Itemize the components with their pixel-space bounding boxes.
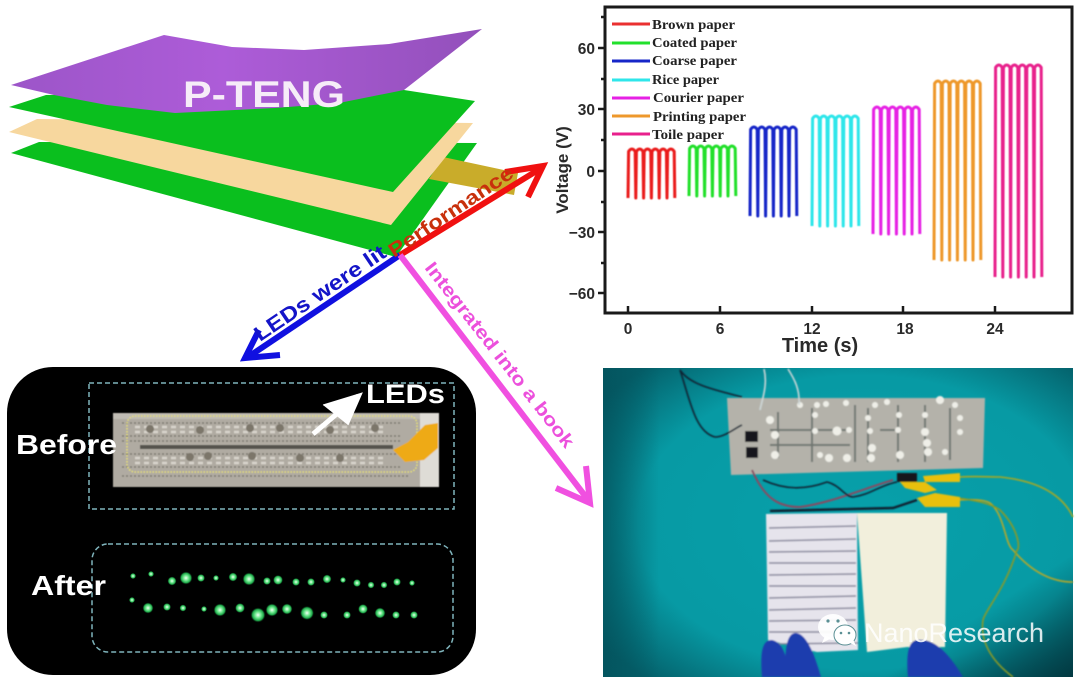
P-TENG layered device (9, 29, 518, 257)
legend (612, 17, 746, 142)
x tick labels: 12 (803, 321, 821, 338)
label: Performance: Performance (384, 162, 518, 262)
y tick labels: 0 (586, 164, 595, 181)
wires (680, 369, 1073, 677)
purple top layer (11, 29, 482, 113)
voltage chart (553, 7, 1072, 357)
arrow: LEDs were lit (245, 255, 400, 358)
blue gloves (761, 633, 963, 677)
lit green LEDs (129, 571, 418, 622)
bottom green layer (11, 142, 477, 257)
x tick labels: 0 (624, 321, 632, 338)
legend: Coated paper (652, 35, 737, 50)
y tick labels: −60 (569, 286, 595, 303)
x tick labels: 6 (716, 321, 725, 338)
label: Integrated into a book: Integrated into a book (421, 258, 580, 452)
legend: Rice paper (652, 72, 719, 87)
watermark NanoResearch: NanoResearch (864, 618, 1044, 648)
breadboard photo (113, 413, 439, 487)
book lines (769, 526, 858, 644)
P-TENG label: P-TENG (183, 74, 345, 115)
label: After: After (31, 570, 106, 601)
dashed box: before (89, 383, 454, 509)
arrow: performance (400, 166, 543, 255)
top green layer (9, 90, 475, 192)
label: Before: Before (16, 429, 117, 460)
waveforms (628, 65, 1042, 277)
board dark traces (770, 405, 950, 462)
axis ticks (598, 17, 995, 313)
legend: Coarse paper (652, 53, 737, 68)
circuit board (727, 398, 985, 475)
panel: LEDs before and after (7, 367, 476, 675)
x axis title: Time (s) (782, 335, 858, 357)
legend: Brown paper (652, 17, 735, 32)
y tick labels: 60 (578, 41, 595, 58)
legend: Toile paper (652, 127, 724, 142)
wechat icon (818, 614, 856, 646)
arrow: integrated into a book (400, 255, 590, 503)
plot frame (605, 7, 1072, 313)
y tick labels: −30 (569, 225, 595, 242)
x tick labels (624, 321, 1004, 338)
y tick labels (569, 41, 595, 303)
label: LEDs were lit: LEDs were lit (250, 241, 390, 346)
black background (7, 367, 476, 675)
legend: Printing paper (653, 109, 746, 124)
board LEDs (766, 396, 963, 462)
dashed box: after (92, 544, 453, 652)
teal background (603, 368, 1073, 677)
x tick labels: 18 (896, 321, 914, 338)
yellow clips (900, 473, 960, 507)
panel: P-TENG integrated into a book photo (603, 368, 1073, 677)
x tick labels: 24 (986, 321, 1004, 338)
book left page (766, 513, 858, 652)
gold electrode tab (429, 157, 518, 195)
y axis title: Voltage (V) (553, 126, 572, 214)
label: LEDs: LEDs (366, 379, 445, 409)
white arrow to LEDs (313, 393, 362, 434)
legend: Courier paper (653, 90, 744, 105)
paper layer (9, 119, 473, 225)
book right page (857, 513, 947, 652)
y tick labels: 30 (578, 102, 595, 119)
black chips (745, 431, 758, 458)
